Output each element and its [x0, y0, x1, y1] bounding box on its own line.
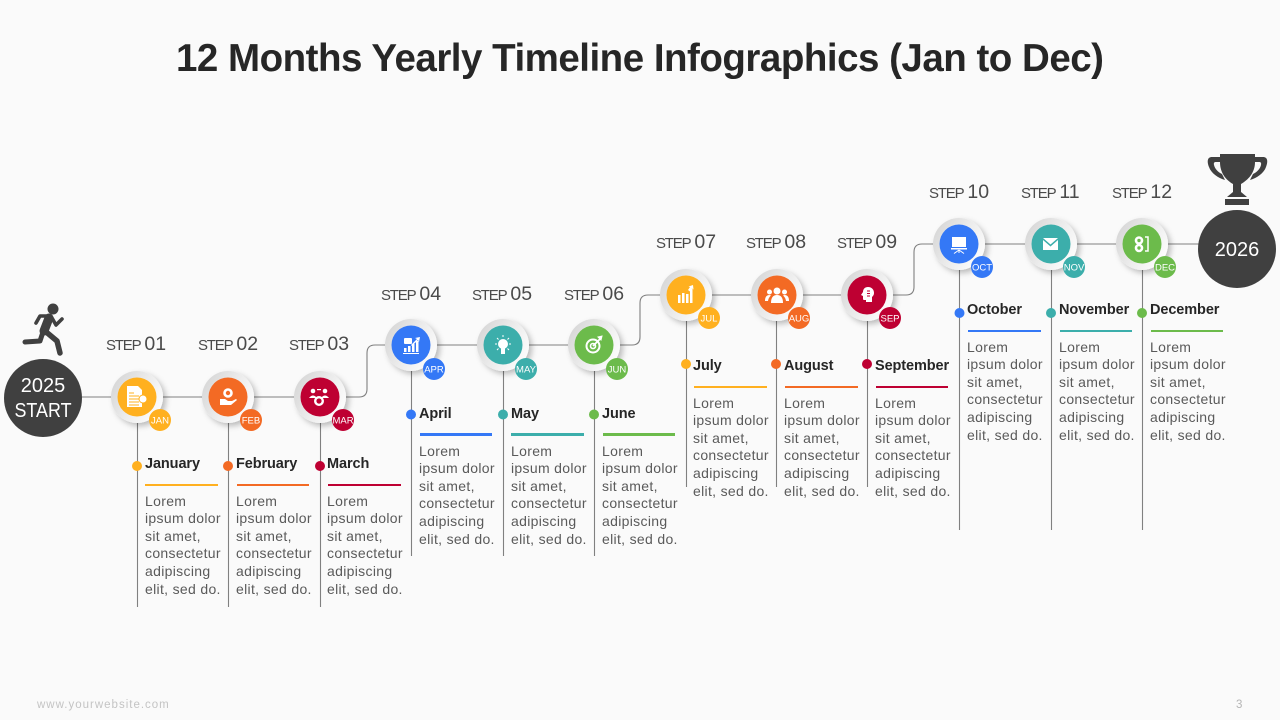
month heading: [771, 358, 858, 388]
description: consectetur: [327, 545, 403, 561]
icon: head: [861, 287, 874, 302]
icon: bar chart with arrow: [678, 285, 694, 303]
description: Lorem: [967, 339, 1008, 355]
step label: STEP04: [381, 283, 441, 305]
start marker: 2025: [4, 304, 82, 437]
description: adipiscing: [875, 465, 940, 481]
description: elit, sed do.: [236, 581, 312, 597]
month heading: [681, 358, 767, 388]
step 12: December: [1112, 181, 1226, 530]
description: consectetur: [1059, 391, 1135, 407]
month heading: March: [327, 456, 369, 472]
description: consectetur: [693, 447, 769, 463]
description: Lorem: [1059, 339, 1100, 355]
vertical line: [228, 423, 230, 607]
step label: STEP05: [472, 283, 532, 305]
month badge: JUL: [701, 314, 717, 324]
vertical line: [1142, 270, 1144, 530]
step 01: January: [106, 333, 221, 607]
description: adipiscing: [511, 513, 576, 529]
description: elit, sed do.: [1059, 427, 1135, 443]
step 04: April: [381, 283, 495, 556]
icon: team and gear: [309, 389, 329, 405]
node: [568, 319, 620, 371]
icon: runner: [25, 304, 62, 353]
month badge: [879, 307, 901, 329]
description: consectetur: [1150, 391, 1226, 407]
end circle: [1198, 210, 1276, 288]
step 05: May: [472, 283, 587, 556]
step label: STEP10: [929, 181, 989, 203]
description: elit, sed do.: [1150, 427, 1226, 443]
step label: STEP09: [837, 231, 897, 253]
month badge: [1063, 256, 1085, 278]
step label: STEP12: [1112, 181, 1172, 203]
vertical line: [866, 321, 868, 487]
month badge: JUN: [608, 364, 626, 376]
month badge: DEC: [1155, 262, 1175, 274]
description: sit amet,: [1150, 374, 1206, 390]
description: Lorem: [784, 395, 825, 411]
timeline connector: [80, 244, 1200, 397]
description: elit, sed do.: [327, 581, 403, 597]
description: Lorem: [419, 443, 460, 459]
month heading: February: [236, 456, 297, 472]
vertical line: [594, 371, 596, 556]
month badge: APR: [424, 364, 444, 376]
description: adipiscing: [419, 513, 484, 529]
description: adipiscing: [1059, 409, 1124, 425]
description: sit amet,: [419, 478, 475, 494]
month heading: August: [784, 358, 834, 374]
description: adipiscing: [1150, 409, 1215, 425]
step 09: September: [837, 231, 951, 499]
description: Lorem: [1150, 339, 1191, 355]
description: adipiscing: [967, 409, 1032, 425]
month badge: JAN: [151, 416, 169, 426]
description: adipiscing: [145, 563, 210, 579]
description: elit, sed do.: [693, 483, 769, 499]
vertical line: [136, 423, 138, 607]
description: ipsum dolor: [967, 356, 1043, 372]
step 10: October: [929, 181, 1043, 530]
month badge: MAR: [332, 416, 354, 426]
end label: 2026: [1215, 239, 1259, 261]
month badge: [606, 358, 628, 380]
node: [841, 269, 893, 321]
month heading: April: [419, 406, 452, 422]
icon: briefcase and growth bars: [403, 337, 420, 354]
month badge: NOV: [1064, 262, 1085, 274]
description: sit amet,: [784, 430, 840, 446]
month heading: June: [602, 406, 635, 422]
month badge: [240, 409, 262, 431]
start label: 2025: [21, 375, 65, 397]
step 06: June: [564, 283, 678, 556]
description: ipsum dolor: [511, 460, 587, 476]
footer website: www.yourwebsite.com: [36, 699, 170, 711]
node: [933, 218, 985, 270]
description: elit, sed do.: [784, 483, 860, 499]
description: ipsum dolor: [236, 510, 312, 526]
description: ipsum dolor: [1059, 356, 1135, 372]
description: ipsum dolor: [1150, 356, 1226, 372]
description: elit, sed do.: [967, 427, 1043, 443]
description: Lorem: [511, 443, 552, 459]
description: elit, sed do.: [145, 581, 221, 597]
step label: STEP06: [564, 283, 624, 305]
description: consectetur: [967, 391, 1043, 407]
node: [660, 269, 712, 321]
month badge: [332, 409, 354, 431]
month heading: July: [693, 358, 722, 374]
vertical line: [1050, 270, 1052, 530]
node: [477, 319, 529, 371]
icon: presentation board: [951, 237, 967, 254]
step label: STEP01: [106, 333, 166, 355]
description: ipsum dolor: [145, 510, 221, 526]
step label: STEP08: [746, 231, 806, 253]
month badge: MAY: [516, 364, 537, 376]
end marker: 2026: [1198, 154, 1276, 288]
description: sit amet,: [145, 528, 201, 544]
month heading: [406, 406, 492, 436]
month heading: January: [145, 456, 200, 472]
step 11: November: [1021, 181, 1135, 530]
step 02: February: [198, 333, 312, 607]
month heading: [1046, 302, 1132, 332]
description: adipiscing: [693, 465, 758, 481]
month badge: [1154, 256, 1176, 278]
vertical line: [958, 270, 960, 530]
month heading: November: [1059, 302, 1130, 318]
icon: document and wrench: [127, 386, 147, 407]
description: Lorem: [602, 443, 643, 459]
month badge: [515, 358, 537, 380]
description: sit amet,: [967, 374, 1023, 390]
vertical line: [410, 371, 412, 556]
month heading: September: [875, 358, 949, 374]
description: sit amet,: [602, 478, 658, 494]
description: sit amet,: [327, 528, 383, 544]
description: Lorem: [145, 493, 186, 509]
description: sit amet,: [875, 430, 931, 446]
month badge: [971, 256, 993, 278]
description: consectetur: [875, 447, 951, 463]
description: Lorem: [327, 493, 368, 509]
start circle: [4, 359, 82, 437]
description: consectetur: [784, 447, 860, 463]
vertical line: [686, 321, 688, 487]
month heading: [954, 302, 1041, 332]
step 08: August: [746, 231, 860, 499]
month heading: [589, 406, 675, 436]
step label: STEP03: [289, 333, 349, 355]
description: ipsum dolor: [602, 460, 678, 476]
node: [1116, 218, 1168, 270]
description: sit amet,: [511, 478, 567, 494]
description: consectetur: [145, 545, 221, 561]
month badge: [423, 358, 445, 380]
month badge: [788, 307, 810, 329]
description: Lorem: [693, 395, 734, 411]
icon: light bulb: [495, 335, 511, 354]
description: elit, sed do.: [511, 531, 587, 547]
description: ipsum dolor: [875, 412, 951, 428]
page number: 3: [1236, 699, 1242, 711]
icon: target: [586, 336, 602, 352]
icon: three people: [765, 288, 789, 303]
description: elit, sed do.: [602, 531, 678, 547]
month heading: December: [1150, 302, 1220, 318]
description: ipsum dolor: [784, 412, 860, 428]
description: consectetur: [602, 495, 678, 511]
vertical line: [320, 423, 322, 607]
description: adipiscing: [602, 513, 667, 529]
node: [202, 371, 254, 423]
icon: envelope: [1043, 238, 1058, 250]
description: consectetur: [511, 495, 587, 511]
description: consectetur: [419, 495, 495, 511]
icon: gears: [1136, 237, 1148, 251]
month heading: [315, 456, 401, 486]
description: ipsum dolor: [693, 412, 769, 428]
description: sit amet,: [693, 430, 749, 446]
description: elit, sed do.: [419, 531, 495, 547]
month badge: AUG: [789, 314, 809, 324]
vertical line: [776, 321, 778, 487]
month heading: [498, 406, 584, 436]
month badge: OCT: [972, 262, 992, 274]
step 03: March: [289, 333, 403, 607]
description: consectetur: [236, 545, 312, 561]
node: [751, 269, 803, 321]
month heading: [1137, 302, 1223, 332]
vertical line: [502, 371, 504, 556]
node: [294, 371, 346, 423]
description: Lorem: [236, 493, 277, 509]
month badge: [149, 409, 171, 431]
month heading: May: [511, 406, 539, 422]
description: sit amet,: [1059, 374, 1115, 390]
month heading: October: [967, 302, 1022, 318]
icon: hand with gear: [220, 390, 237, 405]
start marker: 2025: START: [14, 400, 72, 422]
description: elit, sed do.: [875, 483, 951, 499]
description: adipiscing: [236, 563, 301, 579]
description: Lorem: [875, 395, 916, 411]
description: ipsum dolor: [327, 510, 403, 526]
month heading: [862, 358, 949, 388]
title: 12 Months Yearly Timeline Infographics (Jan to Dec): [176, 37, 1104, 80]
description: ipsum dolor: [419, 460, 495, 476]
description: adipiscing: [327, 563, 392, 579]
description: adipiscing: [784, 465, 849, 481]
month heading: [132, 456, 218, 486]
node: [385, 319, 437, 371]
step 07: July: [656, 231, 769, 499]
step label: STEP02: [198, 333, 258, 355]
node: [1025, 218, 1077, 270]
icon: trophy: [1208, 154, 1267, 205]
step label: STEP11: [1021, 181, 1080, 203]
description: sit amet,: [236, 528, 292, 544]
month badge: [698, 307, 720, 329]
month badge: SEP: [880, 314, 900, 324]
node: [111, 371, 163, 423]
month badge: FEB: [242, 416, 260, 426]
step label: STEP07: [656, 231, 716, 253]
month heading: [223, 456, 309, 486]
